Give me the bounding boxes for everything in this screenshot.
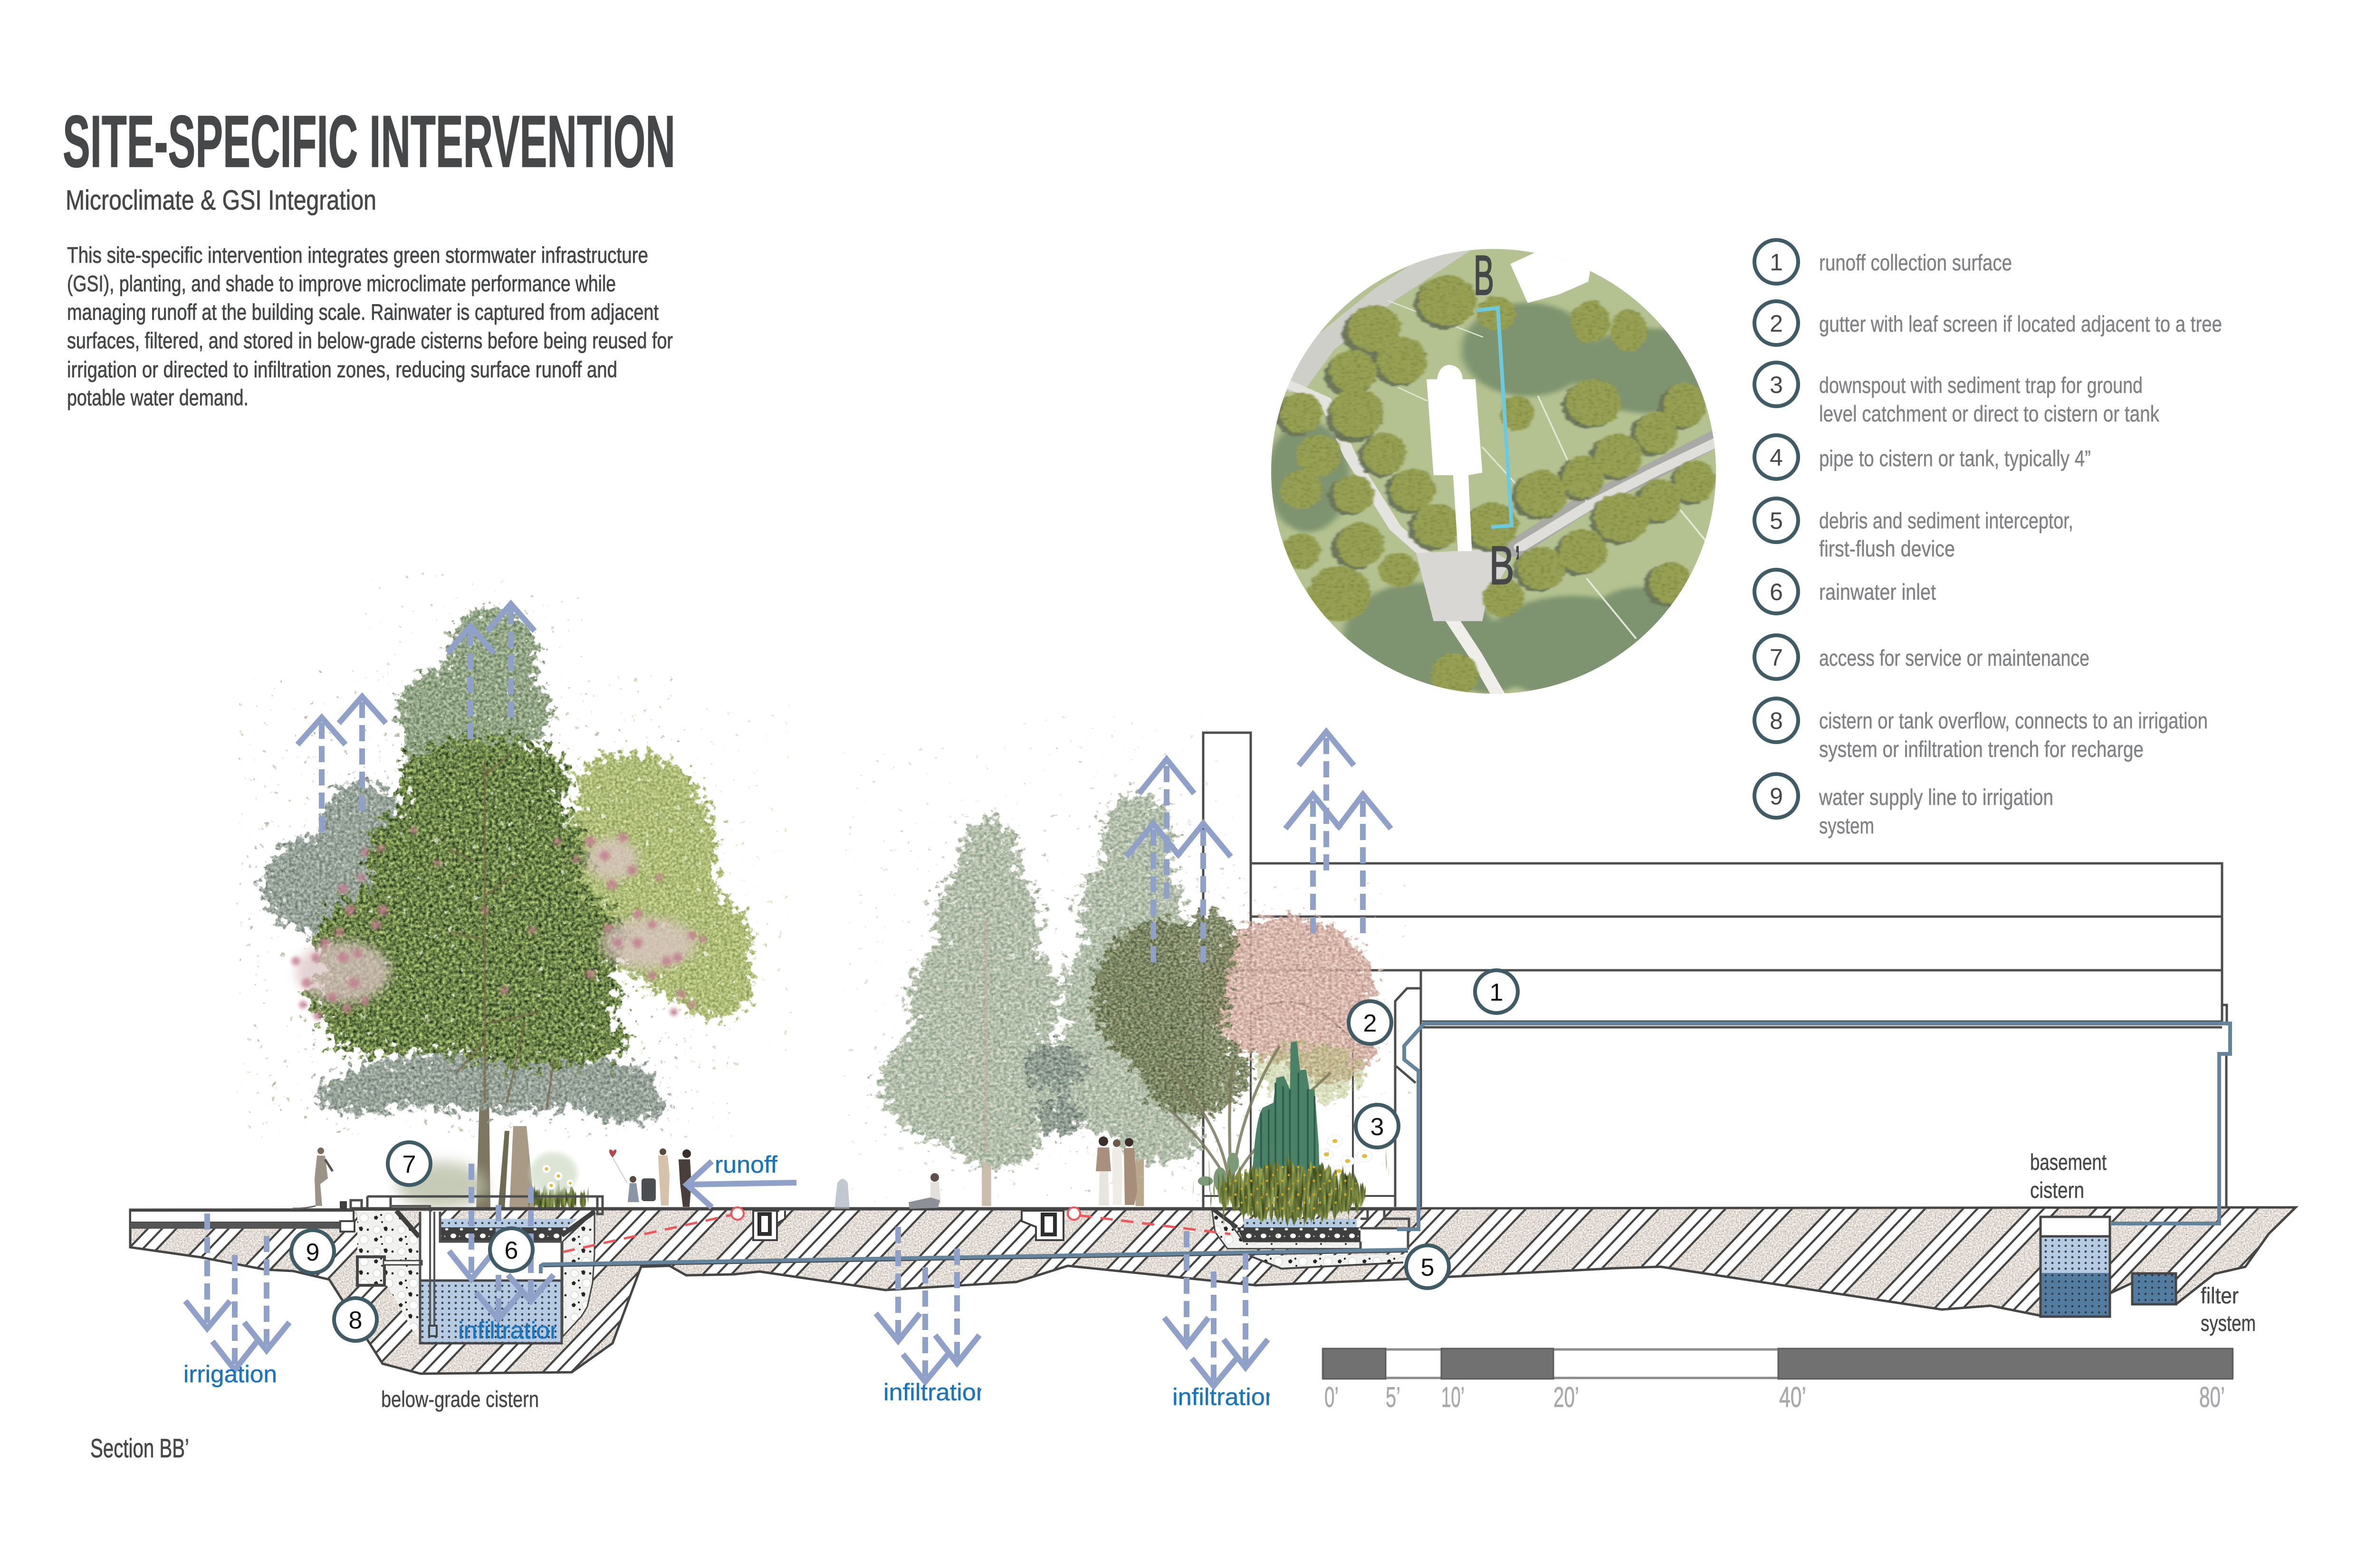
label infiltration mid: infiltration [883,1379,990,1405]
intro text block: surfaces, filtered, and stored in below-grade cisterns before being reused for [67,328,673,353]
right infiltration 2 [1192,1272,1236,1386]
section callout markers [291,970,1518,1341]
intro text block [67,242,673,410]
red dashed first-flush lines [563,1207,1230,1252]
water pipes [541,1023,2230,1273]
right infiltration 1 [1164,1231,1208,1346]
marker 1: 1 [1490,979,1503,1006]
mid infiltration 1 [876,1227,920,1341]
subtitle: Microclimate & GSI Integration [66,185,376,216]
planter soil layer [441,1219,577,1227]
legend item 6 [1754,570,1936,613]
right planter [1212,1208,1415,1269]
back-left tree [261,779,401,934]
legend item 8 [1754,698,2208,762]
label below-grade cistern: below-grade cistern [381,1386,539,1412]
irrigation arrow 1 [185,1214,230,1329]
plaza [1416,549,1510,621]
runoff arrow [687,1161,796,1207]
legend item 2 [1754,301,2222,345]
overflow box [357,1257,384,1285]
legend item 3: downspout with sediment trap for ground [1819,373,2143,398]
top pine [396,607,552,779]
site plan map [1264,239,1726,703]
tank void [420,1242,562,1281]
dark foreground foliage [1022,1042,1088,1136]
intro text block: This site-specific intervention integrates green stormwater infrastructure [67,242,648,268]
arrow mid 1 [1139,759,1194,899]
legend item 3: level catchment or direct to cistern or tank [1819,401,2159,426]
daisies [1320,1135,1372,1176]
main underground pipe [541,1250,1408,1273]
people [293,1137,1137,1209]
ground line [352,1207,1421,1211]
pink blossoms [291,827,707,1020]
main tree [261,607,754,1123]
marker 8 [334,1298,377,1341]
legend item 9 [1754,774,2053,838]
marker 6: 6 [505,1237,518,1264]
scale bar: 20’ [1553,1381,1579,1413]
arrow mid 3 [1177,823,1231,962]
filter system box [2132,1273,2176,1304]
flowering tree crown [1093,909,1377,1179]
marker 7: 7 [402,1151,416,1178]
legend item 7 [1754,635,2089,679]
legend item 6: rainwater inlet [1819,579,1936,604]
legend item 9: 9 [1770,783,1783,810]
tank side walls [420,1212,562,1343]
building section outline [1203,733,2227,1212]
legend item 5: first-flush device [1819,536,1955,561]
family with stroller [628,1148,691,1207]
marker 7 [388,1142,431,1185]
legend item 7: 7 [1770,644,1783,671]
legend item 9: system [1819,813,1874,838]
arrow left 3 [448,626,494,739]
scale bar: 40’ [1779,1381,1806,1413]
seated woman [909,1173,941,1209]
evapotranspiration arrows up [297,604,1391,962]
map label B: B [1474,244,1494,307]
scale bar: 80’ [2199,1381,2225,1413]
infiltration arrows down [185,1164,1268,1386]
legend item 1 [1754,240,2012,284]
arrow left 2 [339,697,386,811]
three women [1096,1137,1137,1205]
label runoff: runoff [715,1151,777,1178]
man with hose [293,1147,333,1208]
label infiltration right: infiltration [1172,1384,1279,1410]
arrow right 2 [1285,794,1341,933]
label irrigation: irrigation [183,1361,277,1387]
arrow right 3 [1337,794,1391,933]
seated figure, faded [834,1179,850,1209]
title: SITE-SPECIFIC INTERVENTION [63,100,675,182]
lower pale foliage [314,1050,669,1123]
label basement cistern: basement [2030,1149,2107,1175]
legend item 8: cistern or tank overflow, connects to an irrigation [1819,708,2208,733]
arrow mid 2 [1126,823,1180,962]
legend item 1: runoff collection surface [1819,250,2012,275]
arrow right 1 [1299,732,1354,870]
building footprint [1427,365,1482,551]
map label B prime: B’ [1489,535,1523,596]
arrow left 4 [488,604,535,717]
left planter plants [397,1152,587,1212]
label filter system [2201,1283,2256,1336]
legend item 5: debris and sediment interceptor, [1819,508,2073,533]
cistern arrow 2 [476,1205,521,1319]
below-grade cistern [340,1196,603,1343]
drainage layer [1237,1227,1360,1242]
legend item 6: 6 [1770,579,1783,605]
right infiltration 3 [1224,1253,1268,1367]
paths [1287,239,1719,698]
intro text block: managing runoff at the building scale. Rainwater is captured from adjacent [67,299,659,325]
gravel [1212,1208,1360,1249]
mid infiltration 2 [903,1267,948,1382]
marker 3: 3 [1370,1113,1384,1141]
irrigation arrow 2 [212,1255,257,1370]
label basement cistern [2030,1149,2107,1203]
tank water [420,1281,562,1343]
front shrub [1214,1164,1366,1220]
legend item 3: 3 [1770,372,1783,398]
marker 9 [291,1230,334,1273]
legend item 2: 2 [1770,310,1783,337]
cistern arrow 1 [449,1164,494,1279]
overflow pipes [391,1206,434,1335]
legend item 7: access for service or maintenance [1819,645,2089,670]
legend [1754,240,2222,838]
marker 8: 8 [349,1307,362,1334]
legend item 1: 1 [1770,249,1783,276]
mid infiltration 3 [935,1249,979,1363]
marker 9: 9 [306,1239,319,1266]
legend item 5 [1754,498,2073,561]
cactus [1252,1041,1320,1196]
service vault [1360,1228,1408,1249]
marker 6 [490,1228,533,1271]
roof gutter and downspout [1397,1023,2230,1229]
soil section [130,1207,2296,1374]
intro text block: potable water demand. [67,385,249,410]
forest patches [1266,303,1726,698]
intro text block: (GSI), planting, and shade to improve microclimate performance while [67,271,616,296]
section cut line [1477,308,1512,527]
planter soil layer [1244,1219,1357,1227]
label filter system: filter [2201,1283,2239,1308]
prickly pear [1198,1153,1239,1191]
storm inlet right [1022,1211,1063,1240]
pale tree 1 [879,816,1061,1206]
label basement cistern: cistern [2030,1177,2084,1203]
pale tree 2 [1046,791,1207,1206]
gravel surround [357,1211,420,1340]
label filter system: system [2201,1310,2256,1336]
marker 5: 5 [1421,1254,1434,1281]
irrigation arrow 3 [244,1236,289,1350]
marker 1 [1475,970,1518,1013]
legend item 4 [1754,435,2091,479]
scale bar: 10’ [1441,1381,1465,1413]
scale bar: 5’ [1386,1381,1400,1413]
left path surface [130,1211,354,1232]
map trees [1274,275,1716,696]
basement cistern [2041,1217,2110,1317]
legend item 4: pipe to cistern or tank, typically 4” [1819,446,2091,471]
storm inlet left [753,1211,785,1240]
planter drainage layer [439,1227,575,1241]
deck [367,1196,603,1214]
background trees [879,791,1377,1206]
scale bar: 0’ [1324,1381,1339,1413]
legend item 5: 5 [1770,507,1783,534]
legend item 8: 8 [1770,708,1783,734]
back-right tree [565,754,754,1019]
legend item 8: system or infiltration trench for recharge [1819,736,2144,762]
legend item 4: 4 [1770,444,1783,471]
marker 2: 2 [1363,1010,1377,1037]
label section BB: Section BB’ [90,1433,189,1463]
main tree trunks [476,1055,535,1209]
legend item 9: water supply line to irrigation [1819,784,2053,810]
label infiltration in tank: infiltration [458,1317,564,1344]
arrow left 1 [297,717,345,832]
marker 2 [1349,1001,1391,1044]
scale bar [1323,1348,2232,1413]
cistern arrow 3 [508,1187,554,1301]
branches [449,754,554,1110]
legend item 3 [1754,363,2159,426]
top-right white notch [1510,251,1590,303]
marker 3 [1356,1105,1399,1147]
legend item 2: gutter with leaf screen if located adjacent to a tree [1819,311,2222,336]
balloon [609,1149,627,1183]
marker 5 [1406,1245,1449,1288]
main pine crown [303,736,634,1066]
intro text block: irrigation or directed to infiltration zones, reducing surface runoff and [67,357,617,382]
